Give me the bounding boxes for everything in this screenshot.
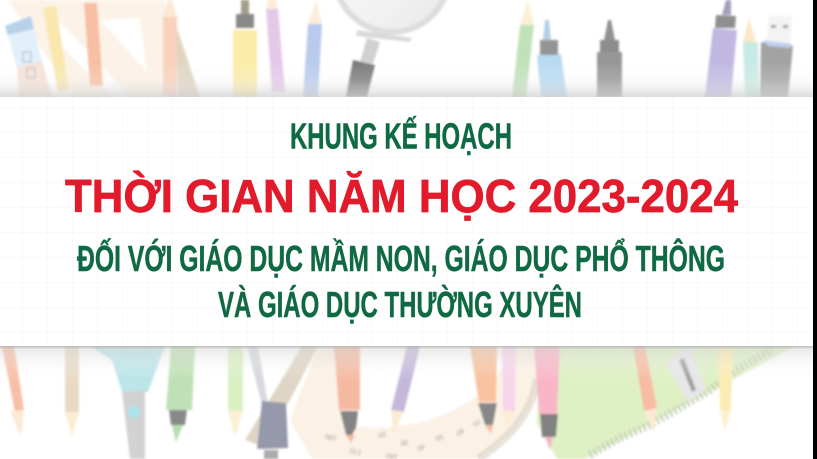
orange pencil xyxy=(84,3,103,86)
protractor numbers: 50 xyxy=(434,432,444,442)
usb drive xyxy=(760,16,793,97)
protractor numbers: 60 xyxy=(454,426,465,437)
protractor numbers: 20 xyxy=(378,430,386,438)
yellow pencil xyxy=(718,346,733,432)
teal pencil xyxy=(743,18,759,97)
top shadow xyxy=(0,62,817,97)
background: stationery, top xyxy=(5,0,793,97)
orange marker xyxy=(470,346,497,434)
compass head xyxy=(257,401,288,459)
notebook spiral xyxy=(590,349,772,455)
heading: school year in red: THỜI GIAN NĂM HỌC 2023-2024 xyxy=(65,170,738,222)
orange pencil xyxy=(633,346,657,432)
green marker xyxy=(166,346,195,442)
pink pencil xyxy=(502,346,516,430)
protractor numbers: 40 xyxy=(416,442,426,451)
magnifier xyxy=(335,0,449,97)
light green pencil xyxy=(228,346,243,437)
purple pencil xyxy=(266,0,285,92)
pink marker xyxy=(534,346,560,450)
purple marker xyxy=(705,0,737,97)
heading: line 1: KHUNG KẾ HOẠCH xyxy=(290,116,512,156)
ruler xyxy=(176,25,200,97)
protractor numbers xyxy=(325,417,482,459)
orange pencil xyxy=(2,346,24,437)
yellow pencil xyxy=(43,6,69,92)
right edge black strip xyxy=(813,0,817,459)
protractor and ruler xyxy=(290,346,538,459)
scissors xyxy=(90,346,165,459)
yellow highlighter xyxy=(233,0,257,97)
triangle hatch xyxy=(245,346,318,445)
blue marker xyxy=(537,20,567,97)
protractor numbers: 70 xyxy=(471,417,482,427)
protractor numbers: 30 xyxy=(400,438,409,446)
sharpener xyxy=(665,346,706,402)
eraser xyxy=(5,16,52,97)
compass arm xyxy=(247,346,268,405)
subheading: line 2: VÀ GIÁO DỤC THƯỜNG XUYÊN xyxy=(218,283,582,325)
green notebook xyxy=(537,346,795,459)
tan pencil xyxy=(65,346,79,437)
protractor numbers: 180 xyxy=(325,432,337,441)
protractor numbers: 170 xyxy=(349,446,363,456)
bottom shadow xyxy=(0,346,817,380)
wooden set square xyxy=(8,0,172,97)
orange marker xyxy=(334,346,360,443)
orange pencil xyxy=(163,0,177,97)
blue pencil xyxy=(303,0,322,97)
background: stationery, bottom xyxy=(2,346,795,459)
title panel xyxy=(0,97,817,346)
dark marker xyxy=(597,20,622,97)
purple pencil xyxy=(391,346,420,434)
green pencil xyxy=(512,0,534,97)
